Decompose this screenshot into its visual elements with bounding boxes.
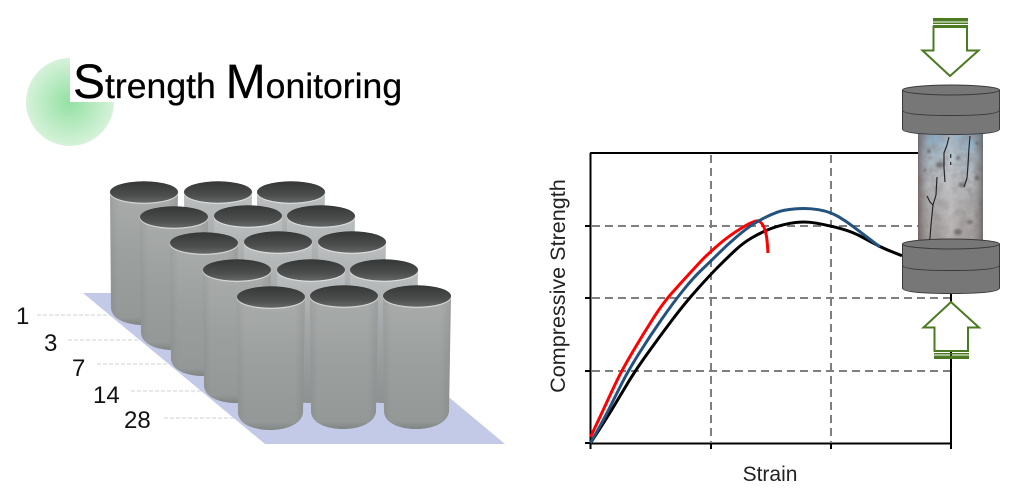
surface voids (924, 141, 980, 235)
specimen body (918, 133, 983, 247)
age labels with leader lines: 3 (44, 330, 57, 357)
curve: red (590, 221, 768, 437)
cylinder grid: specimens by curing age (110, 181, 451, 430)
y axis label: Compressive Strength (545, 179, 570, 393)
x axis label: Strain (743, 463, 797, 486)
bottom platen (902, 239, 1000, 294)
top platen (902, 85, 1000, 134)
curve: black (590, 222, 902, 443)
age labels with leader lines: 7 (72, 355, 85, 382)
icon: green pie behind title (26, 58, 114, 146)
age labels with leader lines: 28 (124, 407, 151, 434)
title: Strength Monitoring (73, 56, 402, 109)
concrete specimen under test (918, 133, 983, 247)
curve: blue (590, 208, 880, 443)
age labels with leader lines: 14 (93, 382, 120, 409)
age labels with leader lines (16, 303, 237, 434)
arrow: bottom load (924, 302, 979, 359)
base plate (83, 293, 505, 444)
cracks (927, 136, 970, 244)
chart axes and ticks (585, 153, 951, 449)
age labels with leader lines: 1 (16, 303, 29, 330)
grid lines (592, 155, 950, 442)
stress-strain chart (545, 153, 951, 486)
arrow: top load (922, 18, 978, 76)
